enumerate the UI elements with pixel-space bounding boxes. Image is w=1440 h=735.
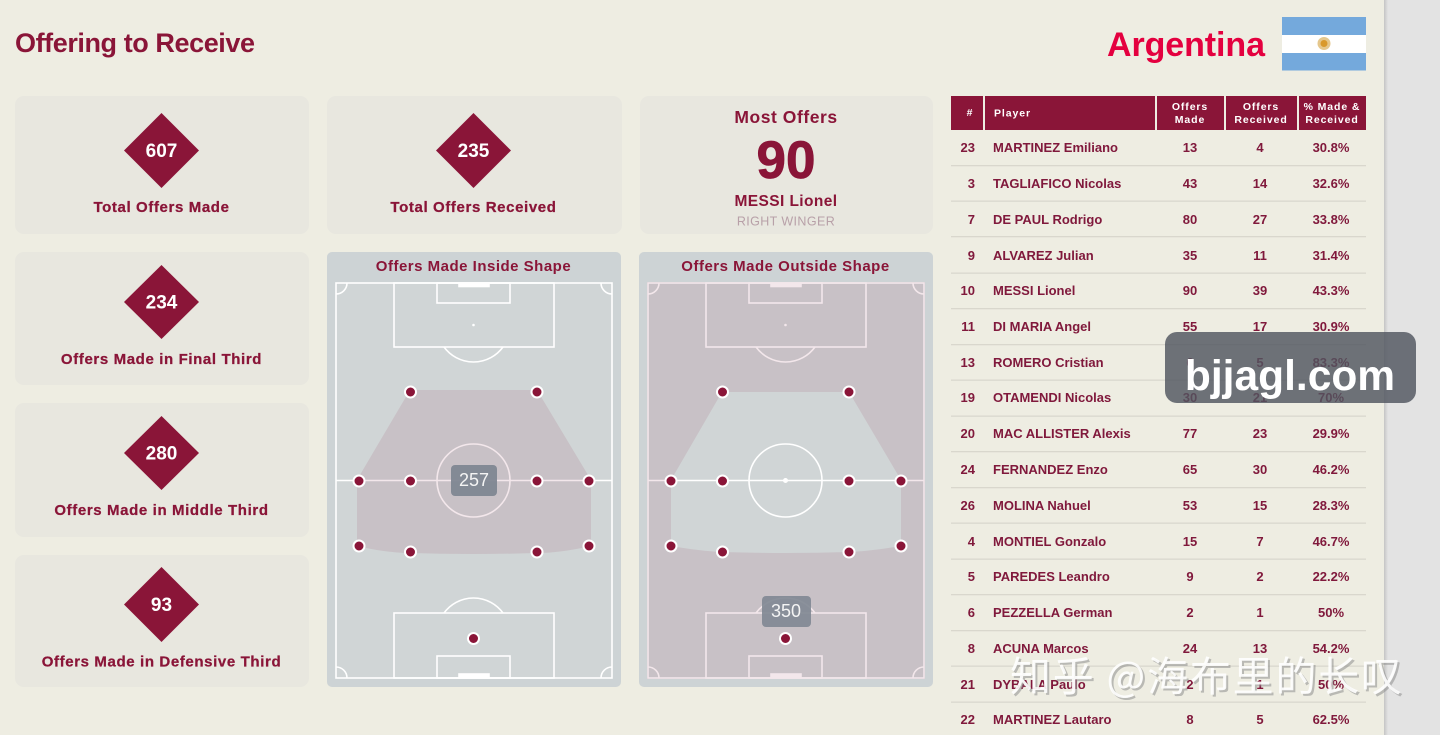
row: Di Maria Angel xyxy=(961,319,1350,334)
row: Acuna Marcos: 13 xyxy=(1253,641,1267,656)
row: Pezzella German: 6 xyxy=(968,605,975,620)
panel: middle third xyxy=(15,403,309,537)
title: Offering to Receive xyxy=(15,28,255,58)
outside shape area xyxy=(647,282,925,679)
row: Paredes Leandro: PAREDES Leandro xyxy=(993,569,1110,584)
row: Martinez Lautaro: 22 xyxy=(961,712,975,727)
row: De Paul Rodrigo: 33.8% xyxy=(1313,212,1350,227)
heading: outside shape: Offers Made Outside Shape xyxy=(681,258,890,275)
row: Paredes Leandro xyxy=(968,569,1350,584)
panel: total offers made xyxy=(15,96,309,234)
value badge: 257 xyxy=(451,465,497,496)
row: Pezzella German xyxy=(968,605,1344,620)
row: Otamendi Nicolas: OTAMENDI Nicolas xyxy=(993,390,1111,405)
row: Montiel Gonzalo: 46.7% xyxy=(1313,534,1350,549)
row: Molina Nahuel xyxy=(961,498,1350,513)
pitch lines xyxy=(336,283,612,678)
row: Alvarez Julian: 35 xyxy=(1183,248,1197,263)
row: Otamendi Nicolas: 19 xyxy=(961,390,975,405)
table header xyxy=(951,96,1366,130)
row: Molina Nahuel: MOLINA Nahuel xyxy=(993,498,1091,513)
table header: Offers xyxy=(1172,101,1208,113)
row: Messi Lionel: MESSI Lionel xyxy=(993,283,1075,298)
row: Messi Lionel xyxy=(961,283,1350,298)
row: Dybala Paulo: 1 xyxy=(1256,677,1264,692)
row: Paredes Leandro: 5 xyxy=(968,569,975,584)
value badge: 350: 350 xyxy=(771,601,801,621)
row: Martinez Lautaro xyxy=(961,712,1350,727)
row: Otamendi Nicolas xyxy=(961,390,1344,405)
row: De Paul Rodrigo: 27 xyxy=(1253,212,1267,227)
row: Martinez Emiliano: MARTINEZ Emiliano xyxy=(993,140,1118,155)
row: Molina Nahuel: 15 xyxy=(1253,498,1267,513)
row: Paredes Leandro: 2 xyxy=(1256,569,1264,584)
row: Tagliafico Nicolas xyxy=(968,176,1350,191)
value badge: 257: 257 xyxy=(459,470,489,490)
row: De Paul Rodrigo xyxy=(968,212,1350,227)
row: Molina Nahuel: 28.3% xyxy=(1313,498,1350,513)
row: Mac Allister Alexis: 29.9% xyxy=(1313,426,1350,441)
row: Di Maria Angel: 11 xyxy=(961,319,975,334)
row: Mac Allister Alexis: MAC ALLISTER Alexis xyxy=(993,426,1131,441)
panel: most offers: RIGHT WINGER xyxy=(737,214,835,228)
panel: defensive third xyxy=(15,555,309,687)
row: Di Maria Angel: DI MARIA Angel xyxy=(993,319,1091,334)
row: Di Maria Angel: 55 xyxy=(1183,319,1197,334)
row: Martinez Lautaro: 62.5% xyxy=(1313,712,1350,727)
pitch lines xyxy=(648,283,924,678)
row: Martinez Lautaro: 5 xyxy=(1256,712,1264,727)
row: Mac Allister Alexis: 77 xyxy=(1183,426,1197,441)
row: Paredes Leandro: 9 xyxy=(1186,569,1194,584)
row: Di Maria Angel: 17 xyxy=(1253,319,1267,334)
row: Romero Cristian xyxy=(961,355,1350,370)
row: Romero Cristian: ROMERO Cristian xyxy=(993,355,1104,370)
watermark: bjjagl.com xyxy=(1165,332,1416,403)
row: Martinez Emiliano: 13 xyxy=(1183,140,1197,155)
watermark: zhihu handle: 知乎 @海布里的长叹 xyxy=(1012,645,1404,705)
player positions xyxy=(666,386,906,644)
row: De Paul Rodrigo: 80 xyxy=(1183,212,1197,227)
icon: Argentina flag xyxy=(1282,17,1366,70)
row: Mac Allister Alexis: 20 xyxy=(961,426,975,441)
row: Tagliafico Nicolas: 3 xyxy=(968,176,975,191)
row: Pezzella German: 50% xyxy=(1318,605,1344,620)
row: Acuna Marcos xyxy=(968,641,1350,656)
panel: final third xyxy=(15,252,309,385)
row: Di Maria Angel: 30.9% xyxy=(1313,319,1350,334)
table header: # xyxy=(967,107,973,119)
row: Fernandez Enzo: FERNANDEZ Enzo xyxy=(993,462,1108,477)
row: Dybala Paulo xyxy=(961,677,1344,692)
row: Pezzella German: 2 xyxy=(1186,605,1194,620)
panel: offers made inside shape xyxy=(327,252,621,687)
row: Messi Lionel: 10 xyxy=(961,283,975,298)
row: Messi Lionel: 43.3% xyxy=(1313,283,1350,298)
row: Martinez Lautaro: MARTINEZ Lautaro xyxy=(993,712,1112,727)
row: Tagliafico Nicolas: 43 xyxy=(1183,176,1197,191)
country name: Argentina xyxy=(1107,26,1266,64)
panel: most offers: MESSI Lionel xyxy=(735,193,837,210)
row: Fernandez Enzo: 30 xyxy=(1253,462,1267,477)
panel: total offers made: 607 xyxy=(146,141,177,162)
row: Alvarez Julian: 31.4% xyxy=(1313,248,1350,263)
player positions xyxy=(354,386,594,644)
row: Montiel Gonzalo: MONTIEL Gonzalo xyxy=(993,534,1106,549)
row: Alvarez Julian: ALVAREZ Julian xyxy=(993,248,1094,263)
table header: Player xyxy=(994,108,1031,120)
row: Martinez Emiliano: 30.8% xyxy=(1313,140,1350,155)
panel: total offers received xyxy=(327,96,622,234)
row: De Paul Rodrigo: DE PAUL Rodrigo xyxy=(993,212,1102,227)
row: Dybala Paulo: 2 xyxy=(1186,677,1194,692)
panel: final third: 234 xyxy=(146,292,178,314)
row: Martinez Lautaro: 8 xyxy=(1186,712,1194,727)
row: Romero Cristian: 6 xyxy=(1186,355,1194,370)
row: De Paul Rodrigo: 7 xyxy=(968,212,975,227)
row: Fernandez Enzo: 24 xyxy=(961,462,976,477)
row: Tagliafico Nicolas: 14 xyxy=(1253,176,1268,191)
panel: total offers made: Total Offers Made xyxy=(93,199,230,216)
watermark: zhihu handle: 知乎 @海布里的长叹 xyxy=(1010,643,1402,703)
row: Alvarez Julian xyxy=(968,248,1350,263)
panel: most offers xyxy=(640,96,933,234)
row: Romero Cristian: 83.3% xyxy=(1313,355,1350,370)
table header: Made xyxy=(1175,114,1205,126)
row: Molina Nahuel: 53 xyxy=(1183,498,1197,513)
row: Messi Lionel: 39 xyxy=(1253,283,1267,298)
row: Otamendi Nicolas: 30 xyxy=(1183,390,1197,405)
row: Dybala Paulo: 21 xyxy=(961,677,975,692)
row: Acuna Marcos: ACUNA Marcos xyxy=(993,641,1089,656)
panel: total offers received: 235 xyxy=(458,141,490,162)
row: Fernandez Enzo xyxy=(961,462,1350,477)
row: Dybala Paulo: 50% xyxy=(1318,677,1344,692)
row: Tagliafico Nicolas: 32.6% xyxy=(1313,176,1350,191)
row: Molina Nahuel: 26 xyxy=(961,498,975,513)
panel: middle third: 280 xyxy=(146,444,177,464)
table header: % Made & xyxy=(1304,101,1360,113)
row: Fernandez Enzo: 46.2% xyxy=(1313,462,1350,477)
row: Acuna Marcos: 8 xyxy=(968,641,975,656)
panel: most offers: 90 xyxy=(757,131,815,190)
row: Martinez Emiliano xyxy=(961,140,1350,155)
watermark: bjjagl.com: bjjagl.com xyxy=(1185,353,1395,400)
row: Acuna Marcos: 54.2% xyxy=(1313,641,1350,656)
row: Montiel Gonzalo xyxy=(968,534,1350,549)
row: Alvarez Julian: 9 xyxy=(968,248,975,263)
row: Martinez Emiliano: 23 xyxy=(961,140,975,155)
row: Otamendi Nicolas: 21 xyxy=(1253,390,1267,405)
row: Romero Cristian: 5 xyxy=(1256,355,1264,370)
player table xyxy=(951,96,1366,727)
panel: total offers received: Total Offers Received xyxy=(390,199,557,216)
panel: defensive third: 93 xyxy=(151,595,172,616)
row: Tagliafico Nicolas: TAGLIAFICO Nicolas xyxy=(993,176,1121,191)
row: Romero Cristian: 13 xyxy=(961,355,975,370)
panel: most offers: Most Offers xyxy=(734,107,838,127)
row: Mac Allister Alexis: 23 xyxy=(1253,426,1267,441)
panel: defensive third: Offers Made in Defensive Third xyxy=(42,654,281,670)
row: Paredes Leandro: 22.2% xyxy=(1313,569,1350,584)
heading: inside shape: Offers Made Inside Shape xyxy=(376,258,571,275)
row: Martinez Emiliano: 4 xyxy=(1256,140,1264,155)
row: Mac Allister Alexis xyxy=(961,426,1350,441)
row: Otamendi Nicolas: 70% xyxy=(1318,390,1344,405)
row: Montiel Gonzalo: 4 xyxy=(968,534,976,549)
table header: Offers xyxy=(1243,101,1279,113)
table header: Received xyxy=(1305,114,1359,126)
panel: final third: Offers Made in Final Third xyxy=(61,351,262,368)
row: Pezzella German: PEZZELLA German xyxy=(993,605,1112,620)
table header: Received xyxy=(1234,114,1288,126)
row: Acuna Marcos: 24 xyxy=(1183,641,1198,656)
inside shape area xyxy=(357,390,591,554)
row: Montiel Gonzalo: 15 xyxy=(1183,534,1197,549)
row: Messi Lionel: 90 xyxy=(1183,283,1197,298)
row: Fernandez Enzo: 65 xyxy=(1183,462,1197,477)
row: Dybala Paulo: DYBALA Paulo xyxy=(993,677,1086,692)
panel: offers made outside shape xyxy=(639,252,933,687)
row: Pezzella German: 1 xyxy=(1256,605,1264,620)
panel: middle third: Offers Made in Middle Third xyxy=(54,502,269,519)
row: Montiel Gonzalo: 7 xyxy=(1256,534,1264,549)
value badge: 350 xyxy=(762,596,811,627)
row: Alvarez Julian: 11 xyxy=(1253,248,1267,263)
